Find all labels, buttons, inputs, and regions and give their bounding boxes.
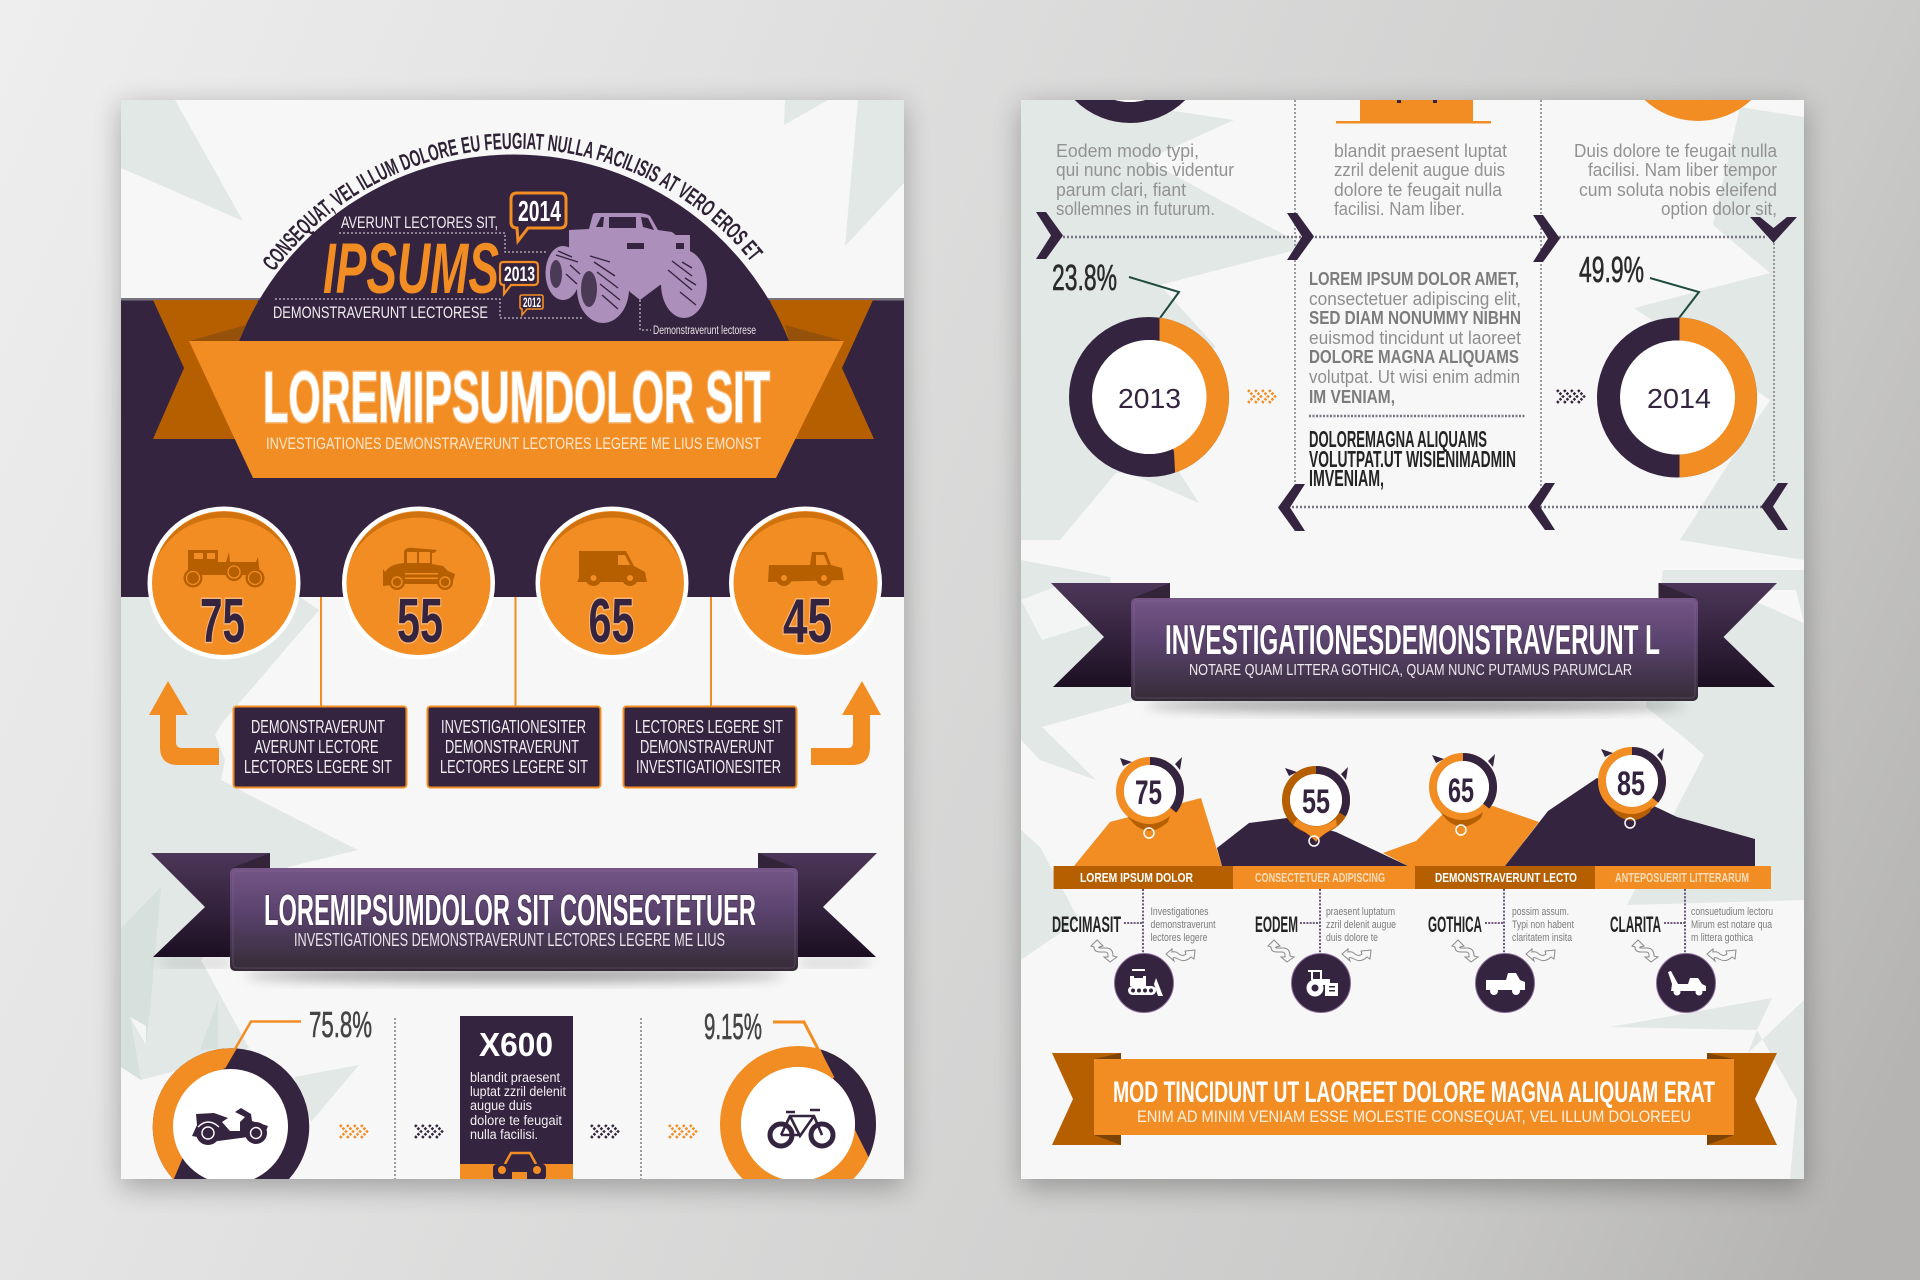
bold text block: SED DIAM NONUMMY NIBHN [1309, 308, 1521, 328]
label box 2: DEMONSTRAVERUNT [445, 737, 579, 757]
purple ribbon left page: INVESTIGATIONES DEMONSTRAVERUNT LECTORES LEGERE ME LIUS [294, 930, 725, 950]
bold text block: volutpat. Ut wisi enim admin [1309, 367, 1520, 387]
label box 1: AVERUNT LECTORE [254, 737, 378, 757]
dotted flow frame [1063, 100, 1774, 507]
column clarita: consuetudium lectoru [1691, 906, 1773, 918]
dark condensed text: DOLOREMAGNA ALIQUAMS [1309, 426, 1487, 452]
ribbon tails orange [153, 300, 874, 439]
text block left: parum clari, fiant [1056, 180, 1186, 200]
connector lines [321, 597, 711, 706]
x600 card: X600 [479, 1026, 553, 1063]
main orange ribbon: INVESTIGATIONES DEMONSTRAVERUNT LECTORES LEGERE ME LIUS EMONST [266, 434, 761, 453]
purple ribbon right page: NOTARE QUAM LITTERA GOTHICA, QUAM NUNC PUTAMUS PARUMCLAR [1189, 662, 1632, 679]
stat circle 55: 55 [397, 587, 443, 656]
stat circle 65 [536, 506, 688, 660]
pin 65 [1432, 754, 1495, 835]
x600 card: nulla facilisi. [470, 1127, 538, 1142]
background shards left page [121, 100, 904, 1122]
bubble 2012 [520, 294, 543, 315]
label box 2 [428, 706, 600, 788]
x600 card: luptat zzril delenit [470, 1084, 566, 1099]
stat circle 75: 75 [200, 587, 245, 656]
column clarita: m littera gothica [1691, 932, 1754, 944]
donut 2014 [1608, 329, 1746, 466]
stat circle 75 [148, 506, 300, 660]
x600 card: blandit praesent [470, 1070, 560, 1085]
column decimasit: DECIMASIT [1052, 912, 1121, 937]
bubble 2012: 2012 [523, 294, 541, 310]
background shards right page [1021, 100, 1804, 1179]
arrow up right [811, 681, 881, 765]
stat circle 45: 45 [783, 587, 832, 656]
main orange ribbon: LOREMIPSUMDOLOR SIT [263, 358, 770, 438]
column decimasit [1052, 889, 1216, 1012]
leader 49.9 [1650, 278, 1699, 318]
column eodem: praesent luptatum [1326, 906, 1395, 918]
curved slogan: CONSEQUAT, VEL ILLUM DOLORE EU FEUGIAT NULLA FACILISIS AT VERO EROS ET [263, 132, 764, 270]
flow chevrons [1036, 212, 1797, 531]
page shadows [121, 106, 1804, 1188]
text block right [1574, 141, 1778, 219]
label box 2: LECTORES LEGERE SIT [440, 757, 588, 777]
text block left [1056, 141, 1234, 219]
dome [239, 155, 789, 341]
percent 75.8: 75.8% [309, 1004, 372, 1045]
monster truck [546, 213, 707, 323]
purple ribbon right page [1051, 583, 1777, 712]
dome label bottom: DEMONSTRAVERUNT LECTORESE [273, 303, 488, 322]
x600 card: dolore te feugait [470, 1113, 562, 1128]
right page [1021, 0, 1804, 1179]
column clarita [1610, 889, 1773, 1012]
text block right: Duis dolore te feugait nulla [1574, 141, 1778, 161]
dotted leader lines [275, 233, 651, 330]
bold text block [1309, 269, 1525, 416]
text block left: qui nunc nobis videntur [1056, 160, 1234, 180]
bold text block: IM VENIAM, [1309, 387, 1395, 407]
dark condensed text: VOLUTPAT.UT WISIENIMADMIN [1309, 446, 1516, 472]
bold text block: DOLORE MAGNA ALIQUAMS [1309, 347, 1519, 367]
dark condensed text [1309, 426, 1516, 491]
dome label top: AVERUNT LECTORES SIT, [341, 213, 498, 232]
text block center [1334, 141, 1507, 219]
column clarita: Mirum est notare qua [1691, 919, 1773, 931]
text block left: sollemnes in futurum. [1056, 199, 1215, 219]
bold text block: euismod tincidunt ut laoreet [1309, 328, 1521, 348]
column eodem: zzril delenit augue [1326, 919, 1396, 931]
text block center: dolore te feugait nulla [1334, 180, 1503, 200]
stat circle 45 [729, 506, 882, 660]
partial car base [1336, 100, 1491, 124]
truck caption: Demonstraverunt lectorese [653, 325, 756, 337]
category bar: ANTEPOSUERIT LITTERARUM [1615, 870, 1749, 885]
bubble 2014 [511, 193, 566, 241]
mountain chart [1074, 778, 1755, 866]
label box 3: LECTORES LEGERE SIT [635, 717, 783, 737]
text block right: option dolor sit, [1661, 199, 1777, 219]
text block right: facilisi. Nam liber tempor [1588, 160, 1777, 180]
bubble 2013: 2013 [504, 263, 535, 286]
label box 1: DEMONSTRAVERUNT [251, 717, 385, 737]
orange ribbon bottom [1052, 1053, 1777, 1145]
label box 2: INVESTIGATIONESITER [441, 717, 586, 737]
arrow up left [149, 681, 219, 765]
donut 2013: 2013 [1118, 383, 1181, 414]
pin 85: 85 [1617, 765, 1645, 803]
bubble 2014: 2014 [518, 196, 561, 228]
category bar [1054, 866, 1771, 889]
donut 2013 [1080, 328, 1218, 466]
bold text block: LOREM IPSUM DOLOR AMET, [1309, 269, 1519, 289]
percent 23.8: 23.8% [1052, 257, 1117, 298]
pin 65: 65 [1448, 772, 1474, 810]
column gothica: possim assum. [1512, 906, 1569, 918]
column clarita: CLARITA [1610, 912, 1661, 937]
pin 75 [1120, 757, 1182, 838]
dark condensed text: IMVENIAM, [1309, 465, 1384, 491]
x600 card [460, 1016, 573, 1180]
text block left: Eodem modo typi, [1056, 141, 1199, 161]
partial top donut orange [1644, 100, 1752, 121]
column gothica: GOTHICA [1428, 912, 1482, 937]
pin 75: 75 [1135, 774, 1162, 812]
x600 card: augue duis [470, 1098, 532, 1113]
stat circle 55 [342, 506, 495, 660]
small chevrons right page [1248, 390, 1584, 403]
column eodem [1255, 889, 1396, 1012]
purple ribbon left page: LOREMIPSUMDOLOR SIT CONSECTETUER [264, 886, 756, 935]
dotted column dividers [395, 1018, 641, 1179]
purple ribbon left page [151, 853, 877, 982]
donut scooter [164, 1022, 301, 1194]
donut 2014: 2014 [1647, 383, 1711, 414]
pin 55: 55 [1302, 783, 1330, 821]
percent 9.15: 9.15% [704, 1006, 762, 1047]
left page [121, 100, 904, 1179]
column decimasit: Investigationes [1150, 906, 1209, 918]
brand name: IPSUMS [323, 230, 499, 309]
top purple band [121, 299, 904, 597]
main orange ribbon [189, 325, 844, 478]
text block center: blandit praesent luptat [1334, 141, 1507, 161]
bubble 2013 [500, 262, 538, 294]
leader 23.8 [1129, 277, 1179, 318]
label box 3 [624, 706, 796, 788]
column eodem: duis dolore te [1326, 932, 1378, 944]
column gothica: claritatem insita [1512, 932, 1573, 944]
category bar: DEMONSTRAVERUNT LECTO [1435, 870, 1577, 885]
text block center: zzril delenit augue duis [1334, 160, 1505, 180]
column gothica: Typi non habent [1512, 919, 1574, 931]
label box 1 [234, 706, 406, 788]
text block right: cum soluta nobis eleifend [1579, 180, 1777, 200]
orange ribbon bottom: ENIM AD MINIM VENIAM ESSE MOLESTIE CONSEQUAT, VEL ILLUM DOLOREEU [1137, 1107, 1691, 1126]
label box 3: DEMONSTRAVERUNT [640, 737, 774, 757]
label box 1: LECTORES LEGERE SIT [244, 757, 392, 777]
donut bicycle [730, 1022, 866, 1192]
text block center: facilisi. Nam liber. [1334, 199, 1465, 219]
bold text block: consectetuer adipiscing elit, [1309, 289, 1521, 309]
small chevrons left page [340, 1125, 696, 1138]
label box 3: INVESTIGATIONESITER [636, 757, 781, 777]
pin 55 [1285, 767, 1348, 846]
pin 85 [1601, 748, 1664, 828]
category bar: LOREM IPSUM DOLOR [1080, 870, 1193, 885]
partial top donut purple [1074, 100, 1186, 123]
percent 49.9: 49.9% [1579, 249, 1644, 290]
column decimasit: demonstraverunt [1150, 919, 1216, 931]
column eodem: EODEM [1255, 912, 1298, 937]
category bar: CONSECTETUER ADIPISCING [1255, 870, 1385, 885]
column gothica [1428, 889, 1574, 1012]
stat circle 65: 65 [588, 587, 634, 656]
column decimasit: lectores legere [1150, 932, 1208, 944]
